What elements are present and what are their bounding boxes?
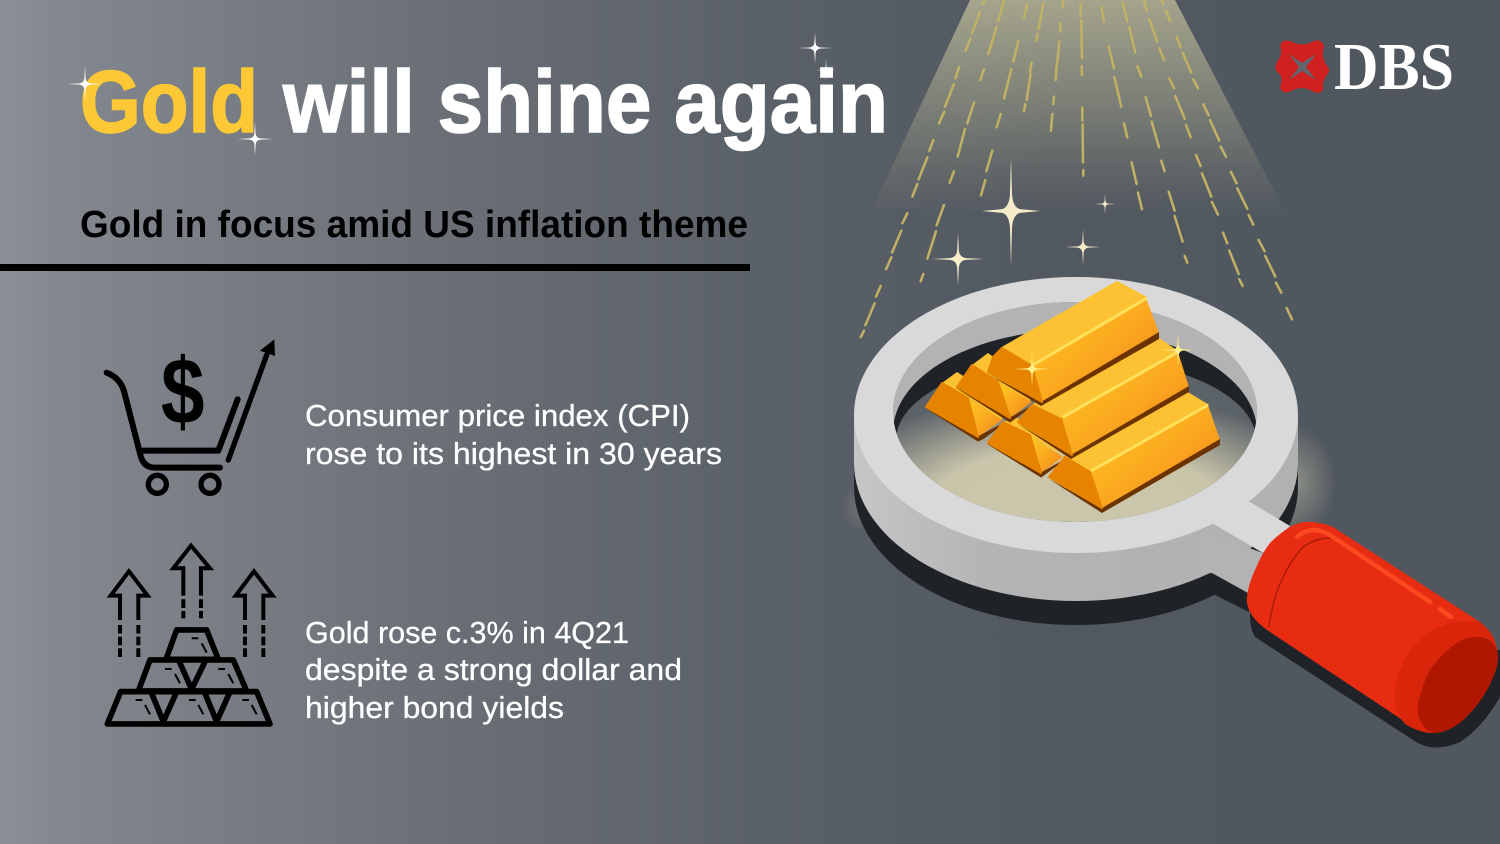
cast shadow xyxy=(854,440,1298,625)
handle highlight xyxy=(1297,530,1451,617)
large bar middle xyxy=(1018,338,1189,459)
small bar back xyxy=(957,353,1032,422)
glow around magnifier xyxy=(842,424,1336,540)
falling gold dashes xyxy=(861,0,1292,337)
ring side wall xyxy=(854,415,1298,601)
icon: shopping cart with rising arrow xyxy=(107,339,275,493)
gold bars xyxy=(926,282,1220,513)
text: CPI: Consumer price index (CPI) xyxy=(305,398,690,433)
icon: gold stack with up arrows xyxy=(107,546,273,724)
light beam xyxy=(861,0,1293,337)
small bar middle xyxy=(988,418,1065,477)
text: gold rose: despite a strong dollar and xyxy=(305,652,682,687)
text: gold rose: higher bond yields xyxy=(305,690,564,725)
large bar top xyxy=(988,282,1159,406)
lens interior xyxy=(890,300,1260,534)
title: Gold xyxy=(80,52,258,151)
handle shadow xyxy=(1250,600,1500,748)
icon: shopping cart with rising arrow: $ xyxy=(161,340,204,444)
text: CPI xyxy=(305,398,722,471)
handle end face xyxy=(1418,637,1498,733)
neck shadow xyxy=(1190,570,1250,612)
text: gold rose xyxy=(305,615,682,725)
subtitle: Gold in focus amid US inflation theme xyxy=(80,204,748,246)
text: gold rose: Gold rose c.3% in 4Q21 xyxy=(305,615,629,650)
ring top face xyxy=(854,277,1298,553)
handle cap xyxy=(1395,621,1498,733)
DBS logo xyxy=(1276,30,1454,104)
sparkles above magnifier xyxy=(932,156,1116,285)
divider xyxy=(0,264,750,271)
magnifying glass xyxy=(854,277,1500,748)
logo mark xyxy=(1276,40,1329,93)
small bar left xyxy=(926,372,1005,441)
title: will shine again xyxy=(282,52,888,151)
title sparkles xyxy=(67,32,836,156)
logo wordmark: DBS xyxy=(1334,30,1454,104)
red handle xyxy=(1247,522,1498,733)
neck side xyxy=(1190,530,1263,593)
large bar front xyxy=(1049,393,1220,513)
gold glints xyxy=(1014,333,1195,387)
handle crease xyxy=(1269,538,1330,627)
text: CPI: rose to its highest in 30 years xyxy=(305,436,722,471)
neck top face xyxy=(1212,500,1290,553)
